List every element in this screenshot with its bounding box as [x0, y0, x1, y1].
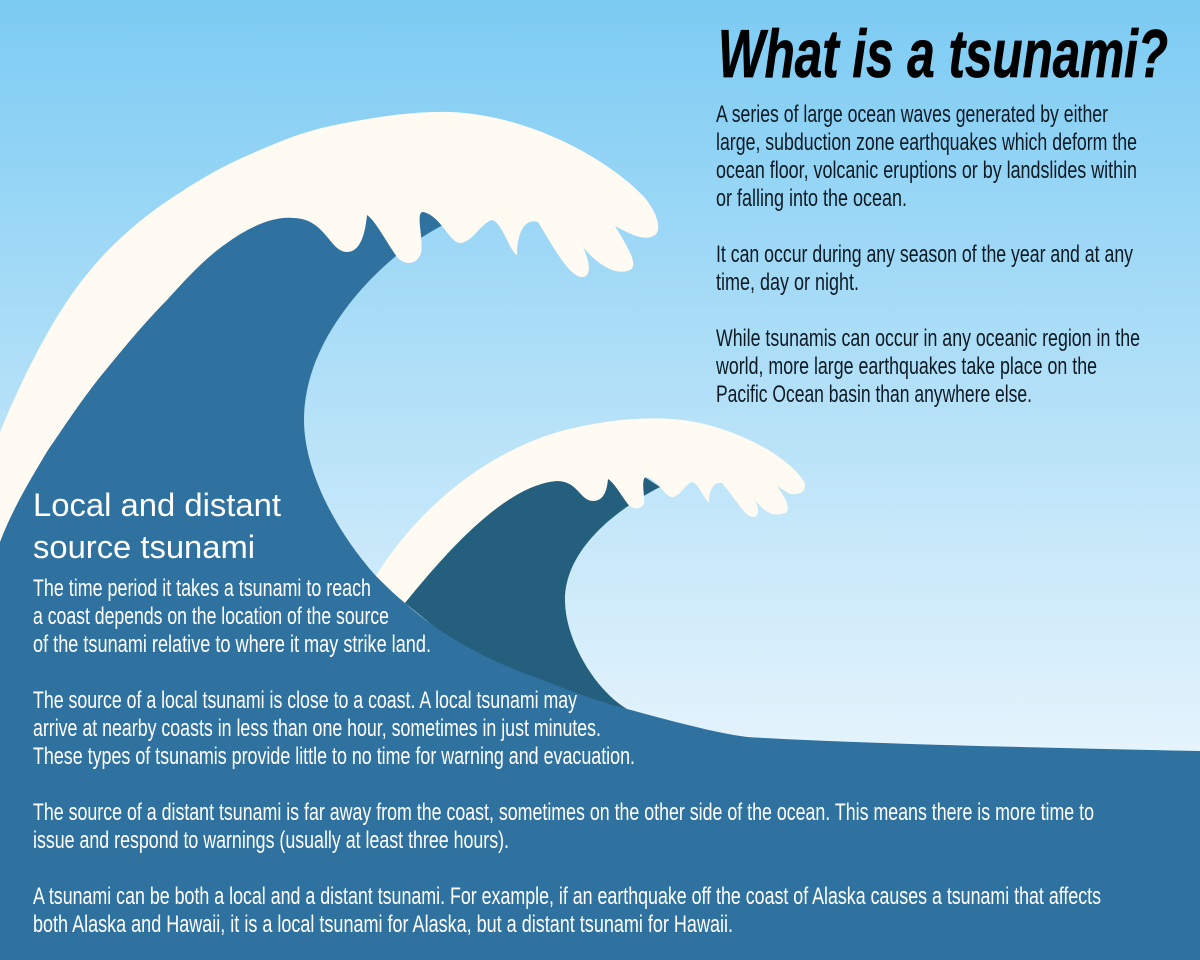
definition text block: or falling into the ocean. [716, 185, 907, 212]
heading: local and distant source tsunami [33, 487, 281, 565]
small wave body [405, 474, 660, 709]
intro text block [33, 575, 431, 658]
definition text block [716, 101, 1137, 212]
heading: local and distant source tsunami: Local and distant [33, 487, 281, 523]
background sky [0, 0, 1200, 760]
local tsunami text block: arrive at nearby coasts in less than one hour, sometimes in just minutes. [33, 715, 601, 742]
intro text block: The time period it takes a tsunami to reach [33, 575, 371, 602]
local tsunami text block: These types of tsunamis provide little to no time for warning and evacuation. [33, 743, 635, 770]
intro text block: of the tsunami relative to where it may strike land. [33, 631, 431, 658]
season text block [716, 241, 1133, 296]
season text block: time, day or night. [716, 269, 859, 296]
distant tsunami text block: issue and respond to warnings (usually at least three hours). [33, 827, 509, 854]
local tsunami text block: The source of a local tsunami is close to a coast. A local tsunami may [33, 687, 577, 714]
region text block: Pacific Ocean basin than anywhere else. [716, 381, 1032, 408]
both local and distant text block [33, 883, 1101, 938]
both local and distant text block: both Alaska and Hawaii, it is a local tsunami for Alaska, but a distant tsunami for Hawaii. [33, 911, 733, 938]
small wave [360, 418, 805, 709]
foam overlay on small wave [557, 440, 647, 508]
large wave foam [0, 112, 658, 542]
intro text block: a coast depends on the location of the source [33, 603, 389, 630]
local tsunami text block [33, 687, 635, 770]
small wave foam [360, 418, 805, 620]
heading: local and distant source tsunami: source tsunami [33, 529, 255, 565]
large wave body and ocean [0, 205, 1200, 960]
region text block [715, 325, 1140, 408]
distant tsunami text block [33, 799, 1094, 854]
